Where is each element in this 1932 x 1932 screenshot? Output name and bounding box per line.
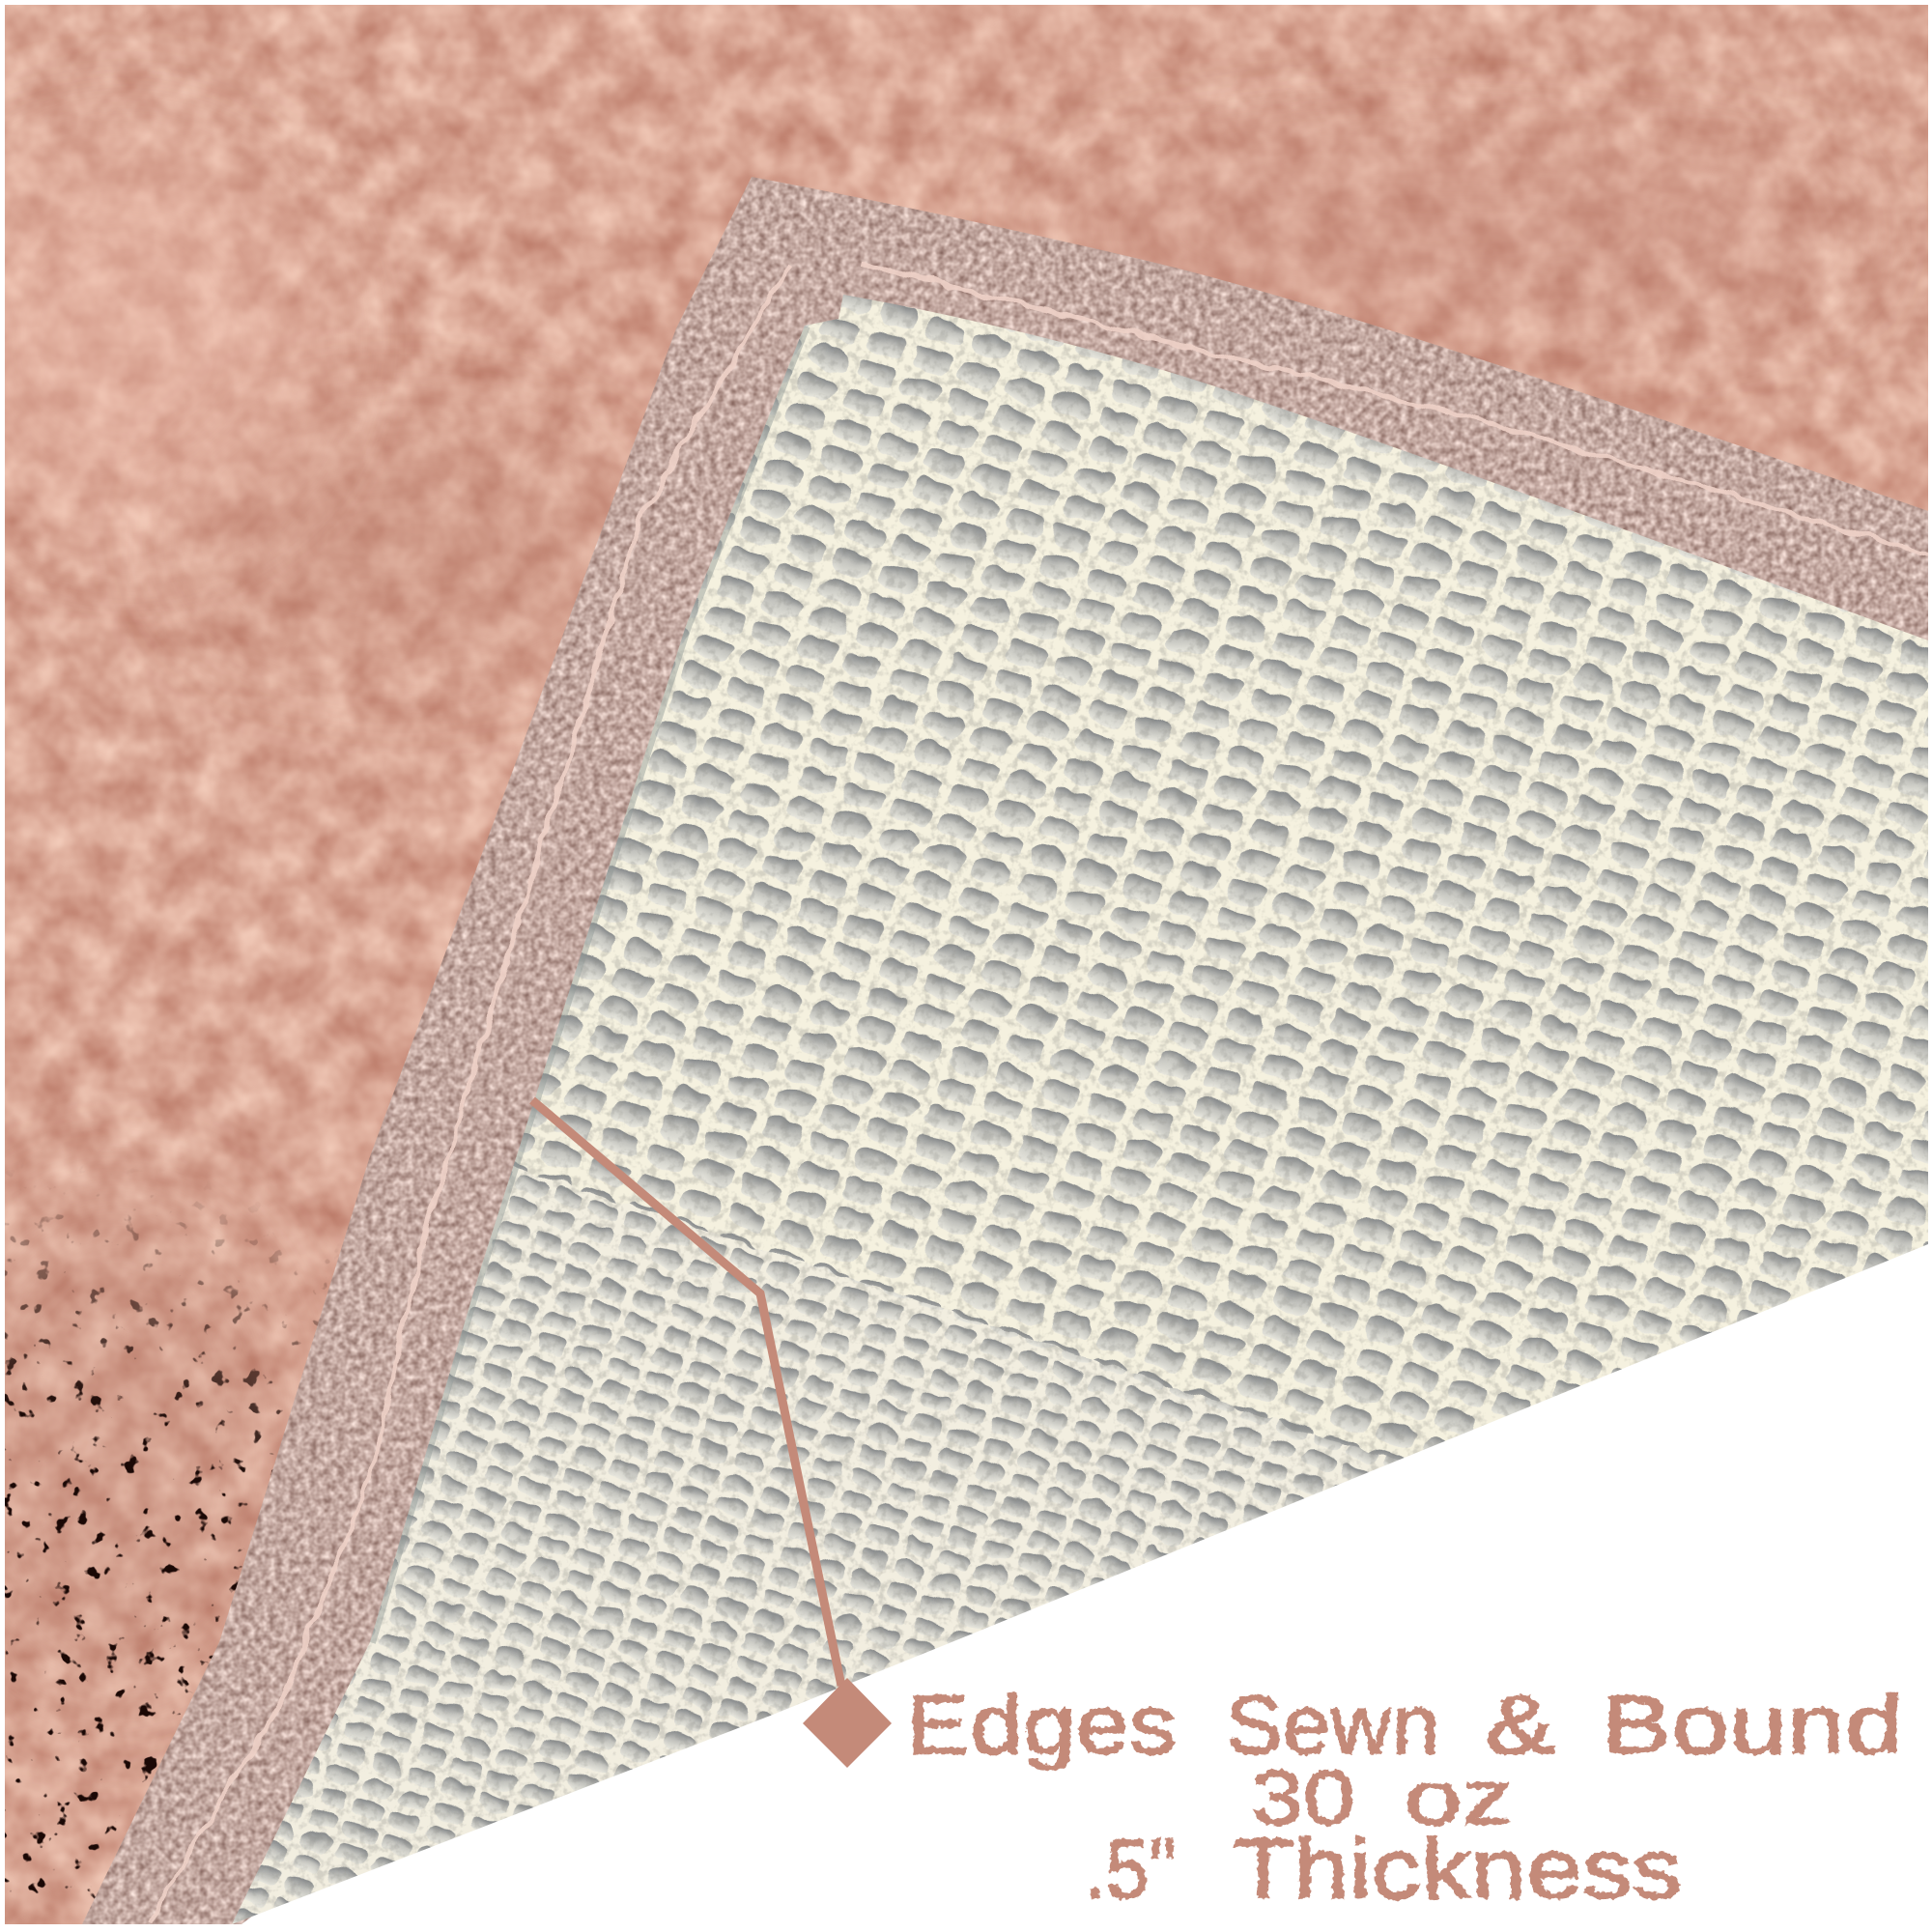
callout line 2 number: 30: 30 (1251, 1754, 1355, 1840)
diamond marker (803, 1678, 892, 1768)
callout line 3 value: .5" (1084, 1821, 1177, 1917)
callout line 1 word: Bound: Bound (1602, 1679, 1903, 1772)
callout line 2 unit: oz: oz (1405, 1754, 1513, 1840)
woven backing mesh (232, 295, 1928, 1924)
leader line (532, 1100, 841, 1686)
callout line 3 word: Thickness: Thickness (1233, 1821, 1682, 1917)
callout text (906, 1679, 1903, 1917)
callout line 1 ampersand: & (1485, 1679, 1555, 1772)
binding stitch seam (148, 265, 1928, 1922)
callout line 1 word: Edges: Edges (906, 1679, 1177, 1772)
callout line 1 word: Sewn: Sewn (1226, 1679, 1439, 1772)
